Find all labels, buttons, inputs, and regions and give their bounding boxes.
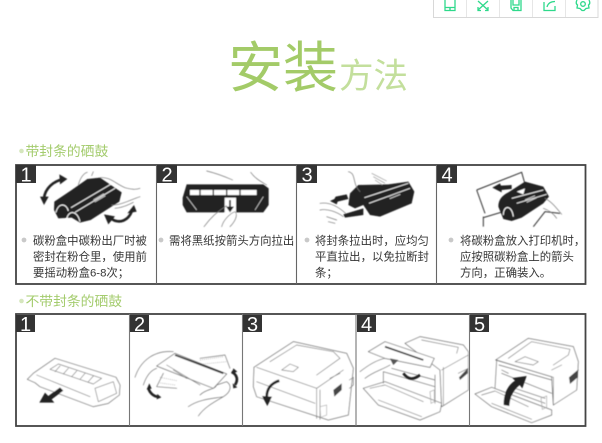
step text bbox=[33, 234, 148, 280]
step text: 将碳粉盒放入打印机时， bbox=[460, 234, 585, 248]
step text: 条； bbox=[315, 266, 338, 280]
step 1 with seal bbox=[16, 164, 148, 280]
step 4 without seal: 4 bbox=[361, 314, 372, 336]
illustration: taking out cartridge bbox=[27, 358, 120, 407]
title: 安装 bbox=[228, 37, 338, 99]
step 1 without seal: 1 bbox=[20, 314, 31, 336]
step 2 without seal bbox=[130, 314, 237, 416]
icon: save bbox=[511, 0, 521, 10]
step 5 without seal bbox=[470, 314, 578, 423]
step 3 with seal bbox=[297, 164, 429, 280]
step 4 with seal: 4 bbox=[442, 164, 453, 186]
illustration: opening printer cover bbox=[253, 342, 353, 420]
step text bbox=[315, 234, 429, 280]
illustration: inserting cartridge bbox=[477, 172, 562, 227]
step text: 碳粉盒中碳粉出厂时被 bbox=[33, 234, 148, 248]
step 2 with seal bbox=[157, 164, 294, 248]
bullet bbox=[159, 238, 163, 242]
step 3 with seal: 3 bbox=[302, 164, 313, 186]
heading: with seal strip: 带封条的硒鼓 bbox=[26, 143, 108, 159]
panel: toner without seal strip bbox=[16, 314, 586, 426]
icon: share bbox=[544, 2, 555, 10]
step 1 with seal: 1 bbox=[20, 164, 32, 186]
icon: settings gear bbox=[576, 0, 590, 10]
step 1 without seal bbox=[16, 314, 120, 407]
illustration: pulling seal strip bbox=[320, 172, 414, 223]
illustration: rocking drum bbox=[135, 352, 237, 416]
step 3 without seal bbox=[243, 314, 353, 420]
step text: 方向，正确装入。 bbox=[460, 266, 551, 280]
step text: 需将黑纸按箭头方向拉出 bbox=[169, 234, 294, 248]
step text: 应按照碳粉盒上的箭头 bbox=[460, 250, 574, 264]
bullet bbox=[305, 238, 309, 242]
step 4 without seal bbox=[357, 314, 468, 420]
panel: toner with seal strip bbox=[16, 164, 586, 284]
step text: 平直拉出，以免拉断封 bbox=[315, 250, 429, 264]
icon: fullscreen arrows bbox=[478, 1, 488, 10]
step text: 将封条拉出时，应均匀 bbox=[315, 234, 429, 248]
step 2 without seal: 2 bbox=[134, 314, 145, 336]
heading: without seal strip: 不带封条的硒鼓 bbox=[26, 293, 122, 309]
toolbar bbox=[434, 0, 598, 18]
title: 方法 bbox=[339, 58, 408, 96]
illustration: shaking cartridge bbox=[40, 172, 140, 224]
bullet bbox=[22, 238, 26, 242]
step 2 with seal: 2 bbox=[162, 164, 173, 186]
title bbox=[228, 37, 408, 99]
illustration: inserting drum in open printer bbox=[360, 337, 468, 420]
step text: 密封在粉仓里，使用前 bbox=[33, 250, 147, 264]
bullet bbox=[449, 238, 453, 242]
illustration: pulling black paper bbox=[183, 171, 269, 227]
illustration: closing printer cover bbox=[475, 338, 578, 423]
step 4 with seal bbox=[437, 164, 585, 280]
icon: phone bbox=[445, 0, 455, 10]
step text bbox=[460, 234, 585, 280]
step 3 without seal: 3 bbox=[247, 314, 258, 336]
step text: 要摇动粉盒6-8次； bbox=[33, 266, 129, 280]
step 5 without seal: 5 bbox=[474, 314, 485, 336]
